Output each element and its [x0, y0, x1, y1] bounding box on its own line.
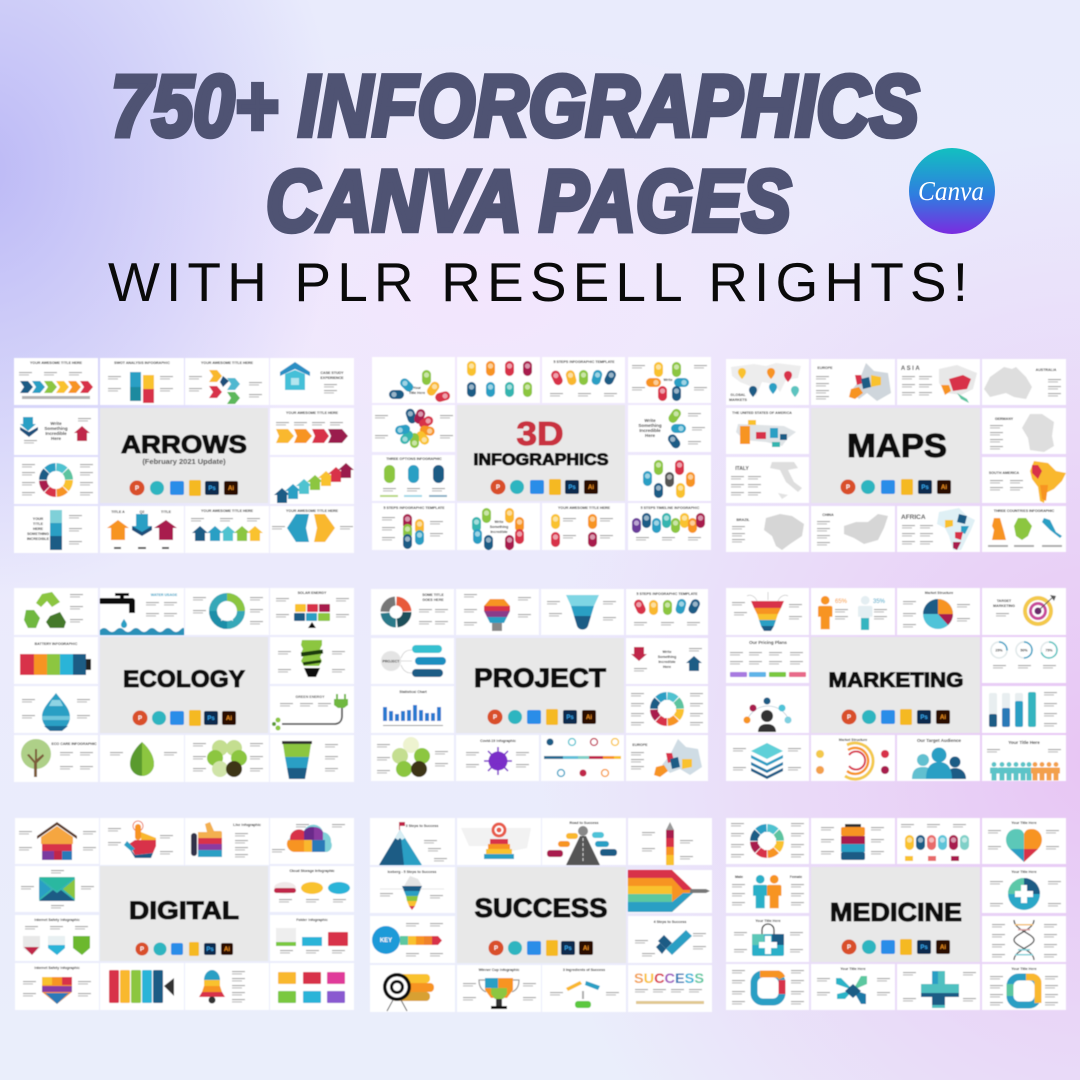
center block: arrows title and app icons: (February 2021 Update)	[142, 457, 226, 466]
thumbnail: single up arrow: EXPERIENCE	[320, 376, 344, 380]
center block: marketing title and app icons: Ps	[920, 715, 928, 721]
thumbnail: tree: ECO CARE INFOGRAPHIC	[51, 742, 97, 746]
thumbnail: vertical arrow stack	[14, 506, 98, 553]
thumbnail: iceberg funnel	[370, 867, 455, 913]
thumbnail: light bulb layers	[456, 589, 539, 635]
thumbnail: arrow process row	[270, 408, 354, 455]
thumbnail: battery infographic: BATTERY INFOGRAPHIC	[35, 642, 78, 646]
thumbnail: Asia map	[897, 359, 980, 405]
thumbnail: circle cross	[982, 867, 1066, 913]
center block: 3D infographics title and app icons	[457, 405, 625, 501]
thumbnail: four steps: 4 Steps to Success	[654, 920, 686, 924]
thumbnail: key to success: KEY	[380, 938, 392, 944]
icon: Canva logo badge	[909, 148, 995, 234]
thumbnail: petal cross	[811, 964, 895, 1010]
thumbnail: opposing arrows write something: Incredible	[659, 660, 675, 664]
center block: arrows title and app icons: ARROWS	[121, 431, 247, 459]
thumbnail: write something with arrows: Write	[50, 421, 62, 426]
center block: marketing title and app icons: P	[847, 715, 851, 721]
thumbnail: single up arrow: CASE STUDY	[320, 371, 344, 375]
thumbnail: green flower	[371, 735, 454, 781]
thumbnail: internet safety shields	[15, 915, 99, 961]
panel: marketing	[726, 588, 1066, 781]
thumbnail: envelope	[15, 866, 99, 912]
thumbnail: Europe map	[626, 735, 708, 781]
thumbnail: bell	[185, 963, 269, 1010]
thumbnail: target stack	[457, 818, 541, 865]
thumbnail: petal cross: Your Title Here	[840, 967, 866, 971]
thumbnail: interlocking arrows	[185, 358, 269, 405]
thumbnail: green light bulb	[270, 637, 354, 684]
center block: ecology title and app icons: Ai	[226, 716, 232, 722]
center block: digital title and app icons: DIGITAL	[129, 897, 239, 925]
thumbnail: row of people: Your Title Here	[1008, 740, 1040, 745]
center block: 3D infographics title and app icons: Ai	[588, 485, 594, 491]
icon: Canva logo badge: Canva	[918, 176, 984, 206]
thumbnail: radial pills	[628, 357, 711, 403]
thumbnail: DNA helix	[982, 916, 1066, 962]
thumbnail: cloud storage: Cloud Storage Infographic	[289, 869, 335, 873]
center block: success title and app icons: Ps	[564, 946, 572, 952]
thumbnail: target: MARKETING	[993, 604, 1015, 608]
thumbnail: six-step arrow row	[14, 358, 98, 405]
thumbnail: ingredients of success	[542, 965, 626, 1012]
thumbnail: four-corner square: Your Title Here	[1011, 967, 1037, 971]
thumbnail: half rings	[811, 735, 895, 781]
center block: marketing title and app icons: Ai	[940, 715, 946, 721]
thumbnail: pricing plans: Our Pricing Plans	[749, 640, 787, 645]
panel: digital	[15, 818, 354, 1010]
center block: arrows title and app icons: Ai	[228, 486, 234, 492]
panel: arrows	[14, 358, 354, 553]
thumbnail: arc of pills: Your	[413, 386, 422, 390]
center block: success title and app icons: SUCCESS	[474, 893, 608, 923]
thumbnail: large cross	[897, 964, 980, 1010]
thumbnail: USA map: THE UNITED STATES OF AMERICA	[732, 411, 792, 415]
thumbnail: world map pins	[726, 359, 809, 405]
thumbnail: China map	[811, 506, 895, 552]
center block: maps title and app icons: P	[846, 485, 850, 491]
thumbnail: project tree: PROJECT	[383, 660, 400, 664]
thumbnail: male and female: Male	[735, 875, 743, 879]
thumbnail: road to success: Road to Success	[570, 821, 598, 825]
thumbnail: recycle symbol	[14, 588, 98, 635]
thumbnail: arrow process row: YOUR AWESOME TITLE HERE	[286, 411, 339, 415]
thumbnail: rainbow funnel	[726, 588, 809, 635]
thumbnail: green energy plug: GREEN ENERGY	[296, 695, 325, 699]
thumbnail: write something with arrows: Something	[44, 426, 68, 431]
thumbnail: vertical arrow stack: INCREDIBLE	[27, 537, 50, 541]
center block: project title and app icons: P	[493, 715, 497, 721]
thumbnail: petal pills circle	[372, 405, 455, 452]
thumbnail: four-part ring: SOME TITLE	[422, 593, 444, 597]
thumbnail: USA map	[726, 408, 809, 454]
thumbnail: write something pills: Write	[644, 418, 656, 423]
thumbnail: pills and icons	[897, 818, 980, 864]
thumbnail: heart	[982, 818, 1066, 864]
thumbnail: five arrows row: YOUR AWESOME TITLE HERE	[201, 509, 254, 513]
thumbnail: clover	[185, 735, 269, 782]
thumbnail: write something circle of pills: Something	[490, 525, 508, 529]
center block: 3D infographics title and app icons: P	[496, 485, 500, 491]
thumbnail: Brazil map	[726, 506, 809, 552]
center block: maps title and app icons: MAPS	[847, 427, 947, 464]
thumbnail: arc of pills: Title Here	[409, 391, 425, 395]
thumbnail: target audience heads: Our Target Audience	[917, 738, 961, 743]
thumbnail: project tree	[371, 638, 454, 684]
thumbnail: water tap: WATER USAGE	[151, 593, 178, 597]
thumbnail: eight pills grid	[457, 357, 540, 403]
thumbnail: winner cup	[457, 965, 541, 1012]
thumbnail: write something with arrows: Here	[51, 436, 61, 441]
thumbnail: leaf	[100, 735, 184, 782]
center block: medicine title and app icons: Ps	[920, 945, 928, 951]
thumbnail: SWOT	[100, 358, 184, 405]
thumbnail: opposing arrows	[270, 506, 354, 553]
thumbnail: five tilted pills: 5 STEPS INFOGRAPHIC TEMPLATE	[553, 360, 615, 364]
center block: project title and app icons	[456, 638, 624, 733]
center block: maps title and app icons: Ai	[941, 485, 947, 491]
thumbnail: SWOT: SWOT ANALYSIS INFOGRAPHIC	[114, 361, 170, 365]
thumbnail: five pills list: 5 STEPS INFOGRAPHIC TEMPLATE	[383, 506, 445, 510]
thumbnail: single up arrow	[270, 358, 354, 405]
thumbnail: Asia map: ASIA	[901, 366, 921, 372]
thumbnail: vertical arrow stack: YOUR	[33, 517, 44, 521]
thumbnail: world map pins: GLOBAL	[730, 393, 746, 397]
thumbnail: opposing arrows write something: Here	[663, 665, 671, 669]
thumbnail: circular star	[185, 588, 269, 635]
thumbnail: male and female: Female	[790, 875, 802, 879]
thumbnail: Germany map	[982, 408, 1066, 454]
center block: project title and app icons: Ai	[586, 715, 592, 721]
thumbnail: opposing arrows write something: Write	[663, 650, 671, 654]
center block: digital title and app icons	[100, 866, 268, 961]
center block: arrows title and app icons	[100, 408, 268, 503]
thumbnail: rocket arrow bands	[628, 870, 712, 913]
center block: success title and app icons: Ai	[583, 946, 589, 952]
thumbnail: six-step arrow row: YOUR AWESOME TITLE HERE	[30, 361, 83, 365]
thumbnail: opposing arrows: YOUR AWESOME TITLE HERE	[286, 509, 339, 513]
center block: project title and app icons: Ps	[566, 715, 574, 721]
thumbnail: four-part ring: GOES HERE	[422, 598, 444, 602]
subtitle: with PLR resell rights: WITH PLR RESELL RIGHTS!	[108, 251, 968, 313]
thumbnail: Australia map: AUSTRALIA	[1036, 368, 1057, 372]
center block: 3D infographics title and app icons: INFOGRAPHICS	[474, 450, 608, 469]
thumbnail: write something pills	[628, 405, 711, 452]
thumbnail: staircase arrows	[270, 457, 354, 504]
thumbnail: green energy plug	[270, 686, 354, 733]
thumbnail: tree	[14, 735, 98, 782]
thumbnail: ingredients of success: 3 Ingredients of Success	[563, 968, 605, 972]
center block: arrows title and app icons: Ps	[208, 486, 216, 492]
thumbnail: arc of pills	[372, 357, 455, 403]
thumbnail: Italy map: ITALY	[735, 466, 749, 472]
thumbnail: write something pills: Incredible	[639, 428, 661, 433]
thumbnail: video camera	[100, 963, 184, 1010]
thumbnail: five pills list	[372, 503, 455, 550]
thumbnail: key to success	[370, 916, 455, 963]
panel: 3D infographics	[372, 357, 711, 550]
thumbnail: South America map	[982, 457, 1066, 503]
center block: success title and app icons: P	[494, 946, 498, 952]
thumbnail: success letters	[628, 965, 712, 1012]
center block: medicine title and app icons	[811, 867, 980, 962]
thumbnail: three donuts: 25%	[995, 648, 1003, 652]
thumbnail: cloud	[270, 818, 354, 864]
thumbnail: write something pills: Something	[638, 423, 662, 428]
thumbnail: three donuts	[982, 637, 1066, 683]
thumbnail: Brazil map: BRAZIL	[736, 518, 750, 522]
thumbnail: head network	[726, 686, 809, 733]
center block: arrows title and app icons: P	[135, 486, 139, 492]
thumbnail: write something with arrows: Incredible	[45, 431, 67, 436]
thumbnail: safety shield: Internet Safety Infographic	[34, 966, 80, 970]
thumbnail: market structure pie: Market Structure	[925, 591, 953, 595]
thumbnail: water tap	[100, 588, 184, 635]
panel: medicine	[726, 818, 1066, 1010]
thumbnail: house	[15, 818, 99, 864]
thumbnail: thumbs up: Like Infographic	[233, 823, 261, 827]
thumbnail: write something circle of pills: Write	[495, 520, 503, 524]
thumbnail: three donuts: 75%	[1045, 648, 1053, 652]
thumbnail: coloured folders	[270, 963, 354, 1010]
thumbnail: medicine jar	[811, 818, 895, 864]
title: Canva Pages: CANVA PAGES	[266, 154, 791, 250]
thumbnail: four-part ring	[371, 589, 454, 635]
thumbnail: radial pills: Write	[664, 378, 672, 382]
thumbnail: folder infographic: Folder Infographic	[296, 918, 328, 922]
thumbnail: thumbs up	[185, 818, 269, 865]
center block: digital title and app icons: P	[140, 947, 144, 953]
center block: ecology title and app icons: Ps	[207, 716, 215, 722]
title: 750+ Inforgraphics: 750+ INFORGRAPHICS	[111, 58, 919, 154]
thumbnail: solar energy panel	[270, 588, 354, 635]
thumbnail: battery infographic	[14, 637, 98, 684]
center block: medicine title and app icons: Ai	[940, 945, 946, 951]
center block: ecology title and app icons: P	[138, 716, 142, 722]
center block: project title and app icons: PROJECT	[474, 663, 607, 693]
thumbnail: covid infographic: Covid-19 Infographic	[480, 739, 516, 743]
center block: ecology title and app icons	[100, 637, 268, 733]
thumbnail: five tilted pills	[542, 357, 625, 403]
thumbnail: success letters: SUCCESS	[634, 971, 704, 986]
thumbnail: person percentages	[811, 588, 895, 635]
thumbnail: write something with arrows	[14, 408, 98, 455]
thumbnail: internet safety shields: Internet Safety Infographic	[34, 918, 80, 922]
panel: success	[370, 818, 712, 1012]
center block: maps title and app icons	[811, 408, 980, 503]
thumbnail: vertical arrow stack: HERE	[33, 527, 44, 531]
thumbnail: three large arrows	[100, 506, 184, 553]
thumbnail: recycling bucket	[270, 735, 354, 782]
thumbnail: vertical arrow stack: TITLE	[33, 522, 44, 526]
thumbnail: medical bag	[726, 916, 809, 962]
center block: ecology title and app icons: ECOLOGY	[123, 666, 245, 693]
thumbnail: medical bag: Your Title Here	[755, 919, 781, 923]
center block: marketing title and app icons: MARKETING	[828, 669, 964, 692]
thumbnail: funnel	[541, 589, 624, 635]
panel: maps	[726, 359, 1066, 552]
center block: medicine title and app icons: P	[847, 945, 851, 951]
thumbnail: three large arrows: Q2	[140, 510, 144, 514]
thumbnail: solar energy panel: SOLAR ENERGY	[298, 591, 327, 595]
thumbnail: four pills: YOUR AWESOME TITLE HERE	[558, 506, 611, 510]
thumbnail: person percentages: 65%	[835, 599, 848, 605]
thumbnail: safety shield	[15, 963, 99, 1010]
thumbnail: covid infographic	[456, 735, 539, 781]
thumbnail: world map pins: MARKETS	[729, 398, 747, 402]
thumbnail: five tilted pills	[626, 589, 708, 635]
thumbnail: four-corner square	[982, 964, 1066, 1010]
panel: project	[371, 589, 708, 781]
thumbnail: China map: CHINA	[822, 513, 834, 517]
center block: 3D infographics title and app icons: 3D	[516, 415, 564, 452]
thumbnail: cloud storage	[270, 866, 354, 912]
thumbnail: pointing hand	[100, 818, 184, 865]
thumbnail: pill timeline: 5 STEPS TIMELINE INFOGRAPHIC	[641, 506, 700, 510]
thumbnail: mountain: 3 Steps to Success	[406, 824, 438, 828]
thumbnail: person percentages: 35%	[873, 599, 886, 605]
center block: success title and app icons	[457, 867, 626, 963]
center block: maps title and app icons: Ps	[921, 485, 929, 491]
center block: 3D infographics title and app icons: Ps	[568, 485, 576, 491]
thumbnail: vertical arrow stack: SOMETHING	[27, 532, 49, 536]
thumbnail: road to success	[542, 818, 626, 865]
thumbnail: row of people	[982, 735, 1066, 781]
thumbnail: three donuts: 50%	[1020, 648, 1028, 652]
thumbnail: timeline	[541, 735, 624, 781]
center block: marketing title and app icons	[811, 637, 980, 733]
thumbnail: folder infographic	[270, 915, 354, 961]
thumbnail: medical ring	[726, 818, 809, 864]
panel: ecology	[14, 588, 354, 782]
thumbnail: circular arrows	[14, 457, 98, 504]
thumbnail: circle cross: Your Title Here	[1011, 870, 1037, 874]
thumbnail: water drop	[14, 686, 98, 733]
center block: digital title and app icons: Ai	[224, 947, 230, 953]
thumbnail: Africa map: AFRICA	[901, 514, 926, 521]
thumbnail: market structure pie	[897, 588, 980, 635]
center block: medicine title and app icons: MEDICINE	[830, 897, 962, 927]
thumbnail: five arrows row	[185, 506, 269, 553]
thumbnail: Germany map: GERMANY	[995, 417, 1014, 421]
thumbnail: five tilted pills: 5 STEPS INFOGRAPHIC TEMPLATE	[636, 592, 698, 596]
thumbnail: three option pills: THREE OPTIONS INFOGRAPHIC	[386, 457, 442, 461]
thumbnail: target with steps	[370, 965, 455, 1012]
thumbnail: write something circle of pills: Incredible	[491, 530, 507, 534]
thumbnail: network of pills	[628, 455, 711, 501]
thumbnail: rocket	[628, 818, 712, 865]
thumbnail: Europe map: EUROPE	[817, 366, 833, 370]
thumbnail: write something pills: Here	[645, 433, 655, 438]
thumbnail: male and female	[726, 867, 809, 913]
thumbnail: opposing arrows write something: Something	[658, 655, 676, 659]
thumbnail: pill timeline	[628, 503, 711, 550]
thumbnail: four steps	[628, 916, 712, 963]
thumbnail: statistical chart: Statistical Chart	[399, 690, 427, 694]
thumbnail: target: TARGET	[997, 599, 1012, 603]
thumbnail: write something circle of pills	[457, 503, 540, 550]
thumbnail: Australia map	[982, 359, 1066, 405]
thumbnail: ring with cross	[626, 686, 708, 733]
thumbnail: iceberg funnel: Iceberg - 5 Steps to Success	[388, 870, 436, 874]
thumbnail: segmented rounded square	[726, 964, 809, 1010]
thumbnail: statistical chart	[371, 686, 454, 733]
thumbnail: three countries	[982, 506, 1066, 552]
thumbnail: interlocking arrows: YOUR AWESOME TITLE HERE	[201, 361, 254, 365]
thumbnail: three large arrows: TITLE A	[111, 510, 125, 514]
center block: digital title and app icons: Ps	[206, 947, 214, 953]
thumbnail: three countries: THREE COUNTRIES INFOGRAPHIC	[994, 509, 1055, 513]
thumbnail: three large arrows: TITLE	[161, 510, 172, 514]
thumbnail: winner cup: Winner Cup Infographic	[479, 968, 519, 972]
thumbnail: three option pills	[372, 455, 455, 501]
thumbnail: opposing arrows write something	[626, 638, 708, 684]
thumbnail: mountain	[370, 818, 455, 865]
thumbnail: Italy map	[726, 457, 809, 503]
thumbnail: target audience heads	[897, 735, 980, 781]
thumbnail: four pills	[542, 503, 625, 550]
thumbnail: Africa map	[897, 506, 980, 552]
thumbnail: South America map: SOUTH AMERICA	[989, 471, 1020, 475]
thumbnail: stacked layers	[726, 735, 809, 781]
thumbnail: half rings: Market Structure	[839, 738, 867, 742]
thumbnail: Europe map	[811, 359, 895, 405]
thumbnail: Europe map: EUROPE	[632, 743, 648, 747]
thumbnail: pricing plans	[726, 637, 809, 683]
thumbnail: target	[982, 588, 1066, 635]
thumbnail: heart: Your Title Here	[1011, 821, 1037, 825]
thumbnail: 3D cylinders	[982, 686, 1066, 733]
